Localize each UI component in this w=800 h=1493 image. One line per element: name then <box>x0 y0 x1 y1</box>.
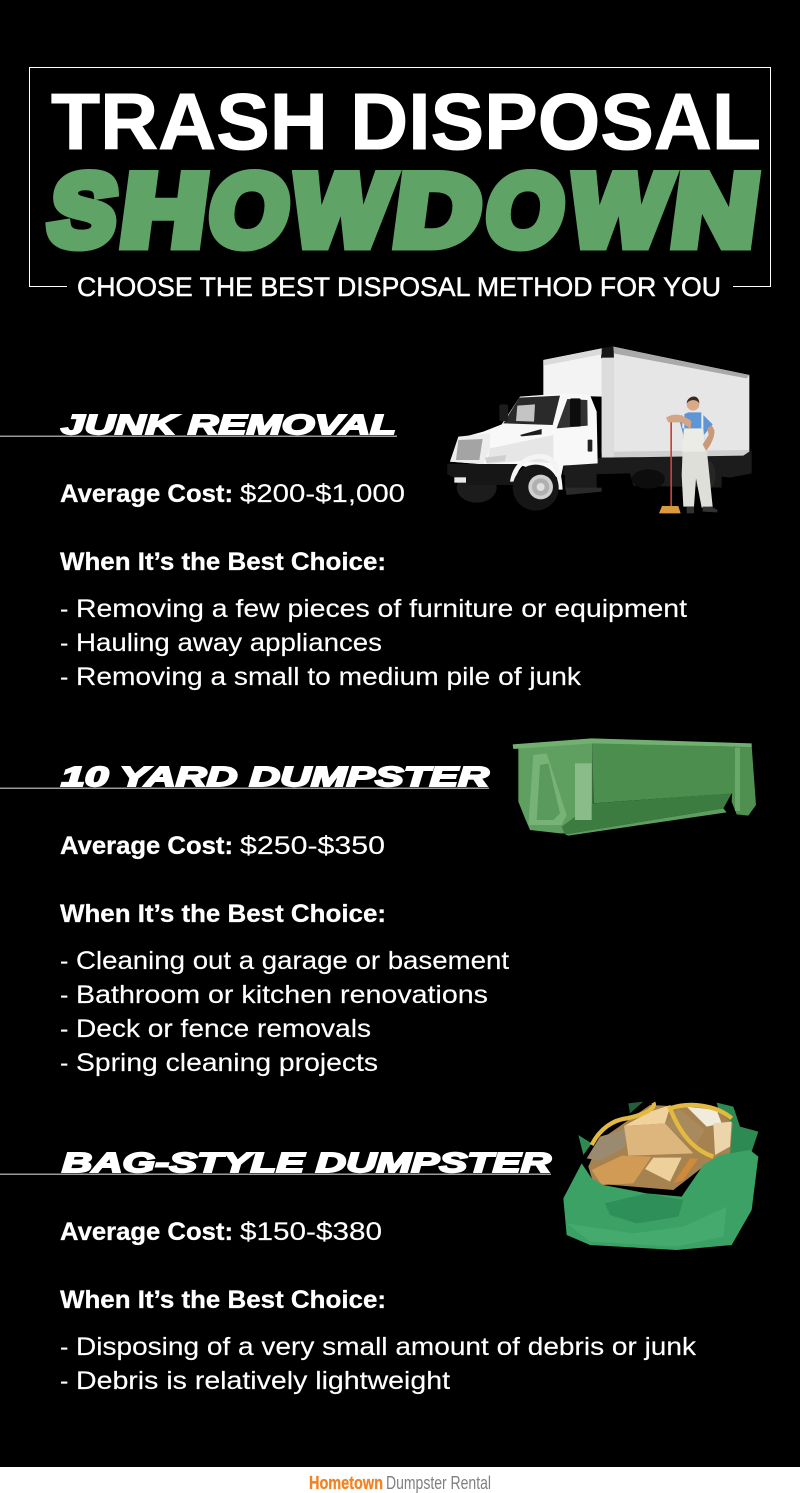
list: 10 yard dumpster uses <box>60 947 509 1077</box>
list: junk removal uses: - <box>60 629 68 657</box>
average cost: 10 yard dumpster: Average Cost: <box>60 832 233 860</box>
list: 10 yard dumpster uses: - <box>60 1015 68 1043</box>
title: showdown: S <box>43 154 124 267</box>
bag front <box>563 1150 758 1250</box>
broom <box>670 421 672 506</box>
list: 10 yard dumpster uses: - <box>60 1049 68 1077</box>
icon: green dumpster <box>513 738 756 836</box>
cab <box>450 393 598 478</box>
cab windows <box>503 396 560 425</box>
list: bag-style dumpster uses: Debris is relatively lightweight <box>76 1367 450 1395</box>
list: junk removal uses: - <box>60 663 68 691</box>
subtitle: CHOOSE THE BEST DISPOSAL METHOD FOR YOU <box>77 272 721 302</box>
front wheel <box>510 454 563 490</box>
chassis <box>563 450 752 488</box>
heading: 10 yard dumpster: 10 YARD DUMPSTER <box>61 761 490 792</box>
far front wheel <box>457 473 497 503</box>
subheading: best choice: When It’s the Best Choice: <box>60 900 386 928</box>
footer logo: Dumpster Rental <box>386 1473 491 1493</box>
list: 10 yard dumpster uses: - <box>60 981 68 1009</box>
list: 10 yard dumpster uses: Bathroom or kitchen renovations <box>76 981 488 1009</box>
panel: 10 yard dumpster <box>0 738 756 1077</box>
truck box <box>543 347 613 458</box>
list: junk removal uses: - <box>60 595 68 623</box>
title: showdown: D <box>388 154 488 267</box>
worker legs <box>682 448 713 508</box>
subheading: best choice: When It’s the Best Choice: <box>60 1286 386 1314</box>
average cost: bag-style dumpster: Average Cost: <box>60 1218 233 1246</box>
bumper <box>447 464 520 485</box>
average cost: bag-style dumpster: $150-$380 <box>240 1218 382 1246</box>
subheading: best choice: When It’s the Best Choice: <box>60 548 386 576</box>
list: bag-style dumpster uses: - <box>60 1367 68 1395</box>
list: 10 yard dumpster uses: Cleaning out a garage or basement <box>76 947 509 975</box>
average cost: junk removal <box>60 480 405 508</box>
debris <box>588 1105 733 1190</box>
yellow straps <box>592 1103 654 1145</box>
icon: dumpster bag with debris <box>563 1102 758 1250</box>
worker torso <box>678 412 713 450</box>
title frame <box>30 68 770 286</box>
list: junk removal uses: Removing a few pieces of furniture or equipment <box>76 595 687 623</box>
title: showdown: O <box>203 154 296 267</box>
title: showdown: H <box>115 154 214 267</box>
list: 10 yard dumpster uses: - <box>60 947 68 975</box>
average cost: 10 yard dumpster <box>60 832 385 860</box>
footer logo <box>309 1473 491 1493</box>
panel: bag-style dumpster <box>0 1102 758 1395</box>
list: junk removal uses: Hauling away appliances <box>76 629 382 657</box>
icon: box truck with worker <box>447 346 752 513</box>
heading: junk removal: JUNK REMOVAL <box>61 409 396 440</box>
panel: junk removal <box>0 346 752 691</box>
list: 10 yard dumpster uses: Spring cleaning projects <box>76 1049 378 1077</box>
heading: bag-style dumpster: BAG-STYLE DUMPSTER <box>62 1147 552 1178</box>
title: showdown: W <box>286 154 397 267</box>
bag back flaps <box>578 1135 592 1155</box>
list: junk removal uses <box>60 595 687 691</box>
footer logo: Hometown <box>309 1473 383 1493</box>
step <box>565 467 597 488</box>
title block <box>30 68 770 302</box>
average cost: junk removal: $200-$1,000 <box>240 480 405 508</box>
list: 10 yard dumpster uses: Deck or fence removals <box>76 1015 371 1043</box>
list: bag-style dumpster uses <box>60 1333 697 1395</box>
list: bag-style dumpster uses: Disposing of a very small amount of debris or junk <box>76 1333 697 1361</box>
average cost: junk removal: Average Cost: <box>60 480 233 508</box>
footer bar <box>0 1467 800 1493</box>
average cost: 10 yard dumpster: $250-$350 <box>240 832 385 860</box>
average cost: bag-style dumpster <box>60 1218 382 1246</box>
grille <box>456 439 483 460</box>
title: showdown: W <box>564 154 675 267</box>
title: trash disposal: TRASH DISPOSAL <box>51 77 761 166</box>
list: junk removal uses: Removing a small to medium pile of junk <box>76 663 582 691</box>
list: bag-style dumpster uses: - <box>60 1333 68 1361</box>
title: showdown: N <box>666 154 765 267</box>
title: showdown: O <box>480 154 571 267</box>
